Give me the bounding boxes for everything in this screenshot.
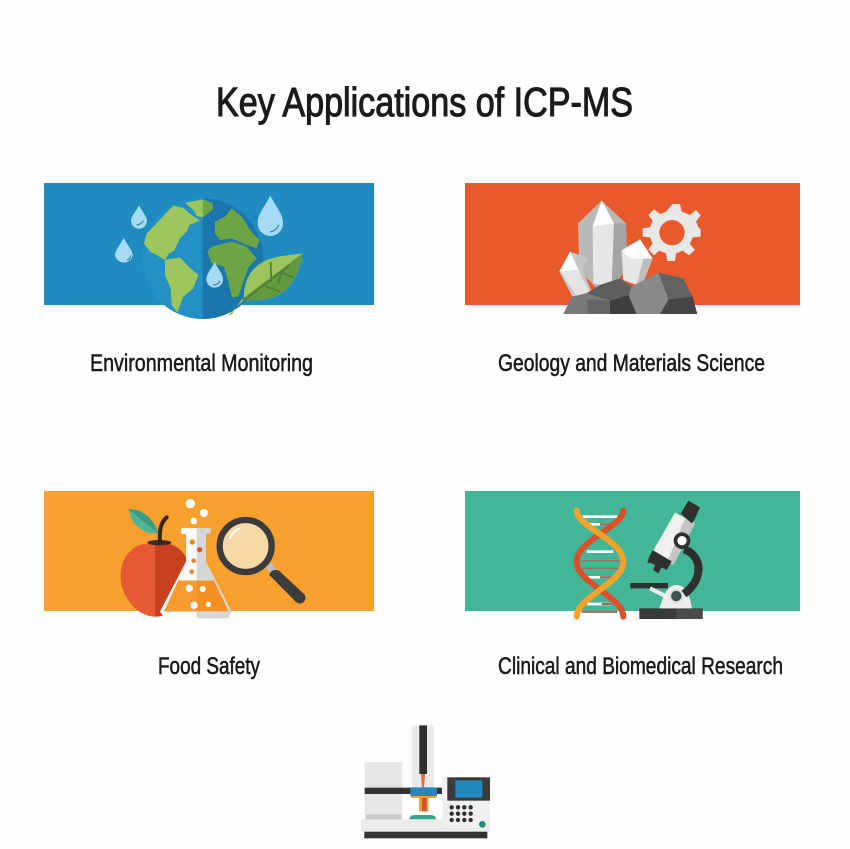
label: Food Safety xyxy=(158,653,260,680)
label: Clinical and Biomedical Research xyxy=(498,653,783,680)
label: Environmental Monitoring xyxy=(90,350,313,377)
panel: food safety xyxy=(44,491,374,680)
banner: orange-red xyxy=(465,183,800,305)
banner: teal xyxy=(465,491,800,611)
label: Geology and Materials Science xyxy=(498,350,765,377)
panel: environmental monitoring xyxy=(44,183,374,377)
title: Key Applications of ICP-MS xyxy=(216,79,633,125)
icon: DNA helix and microscope xyxy=(577,501,703,619)
icon: globe, drops and leaf xyxy=(115,196,303,319)
panel: geology and materials science xyxy=(465,183,800,377)
icon: apple, flask and magnifier xyxy=(121,499,306,618)
panel: clinical and biomedical research xyxy=(465,491,800,680)
banner: amber xyxy=(44,491,374,611)
icon: ICP-MS instrument xyxy=(361,725,490,838)
banner: blue xyxy=(44,183,374,305)
icon: crystals, gear and rocks xyxy=(559,201,701,314)
